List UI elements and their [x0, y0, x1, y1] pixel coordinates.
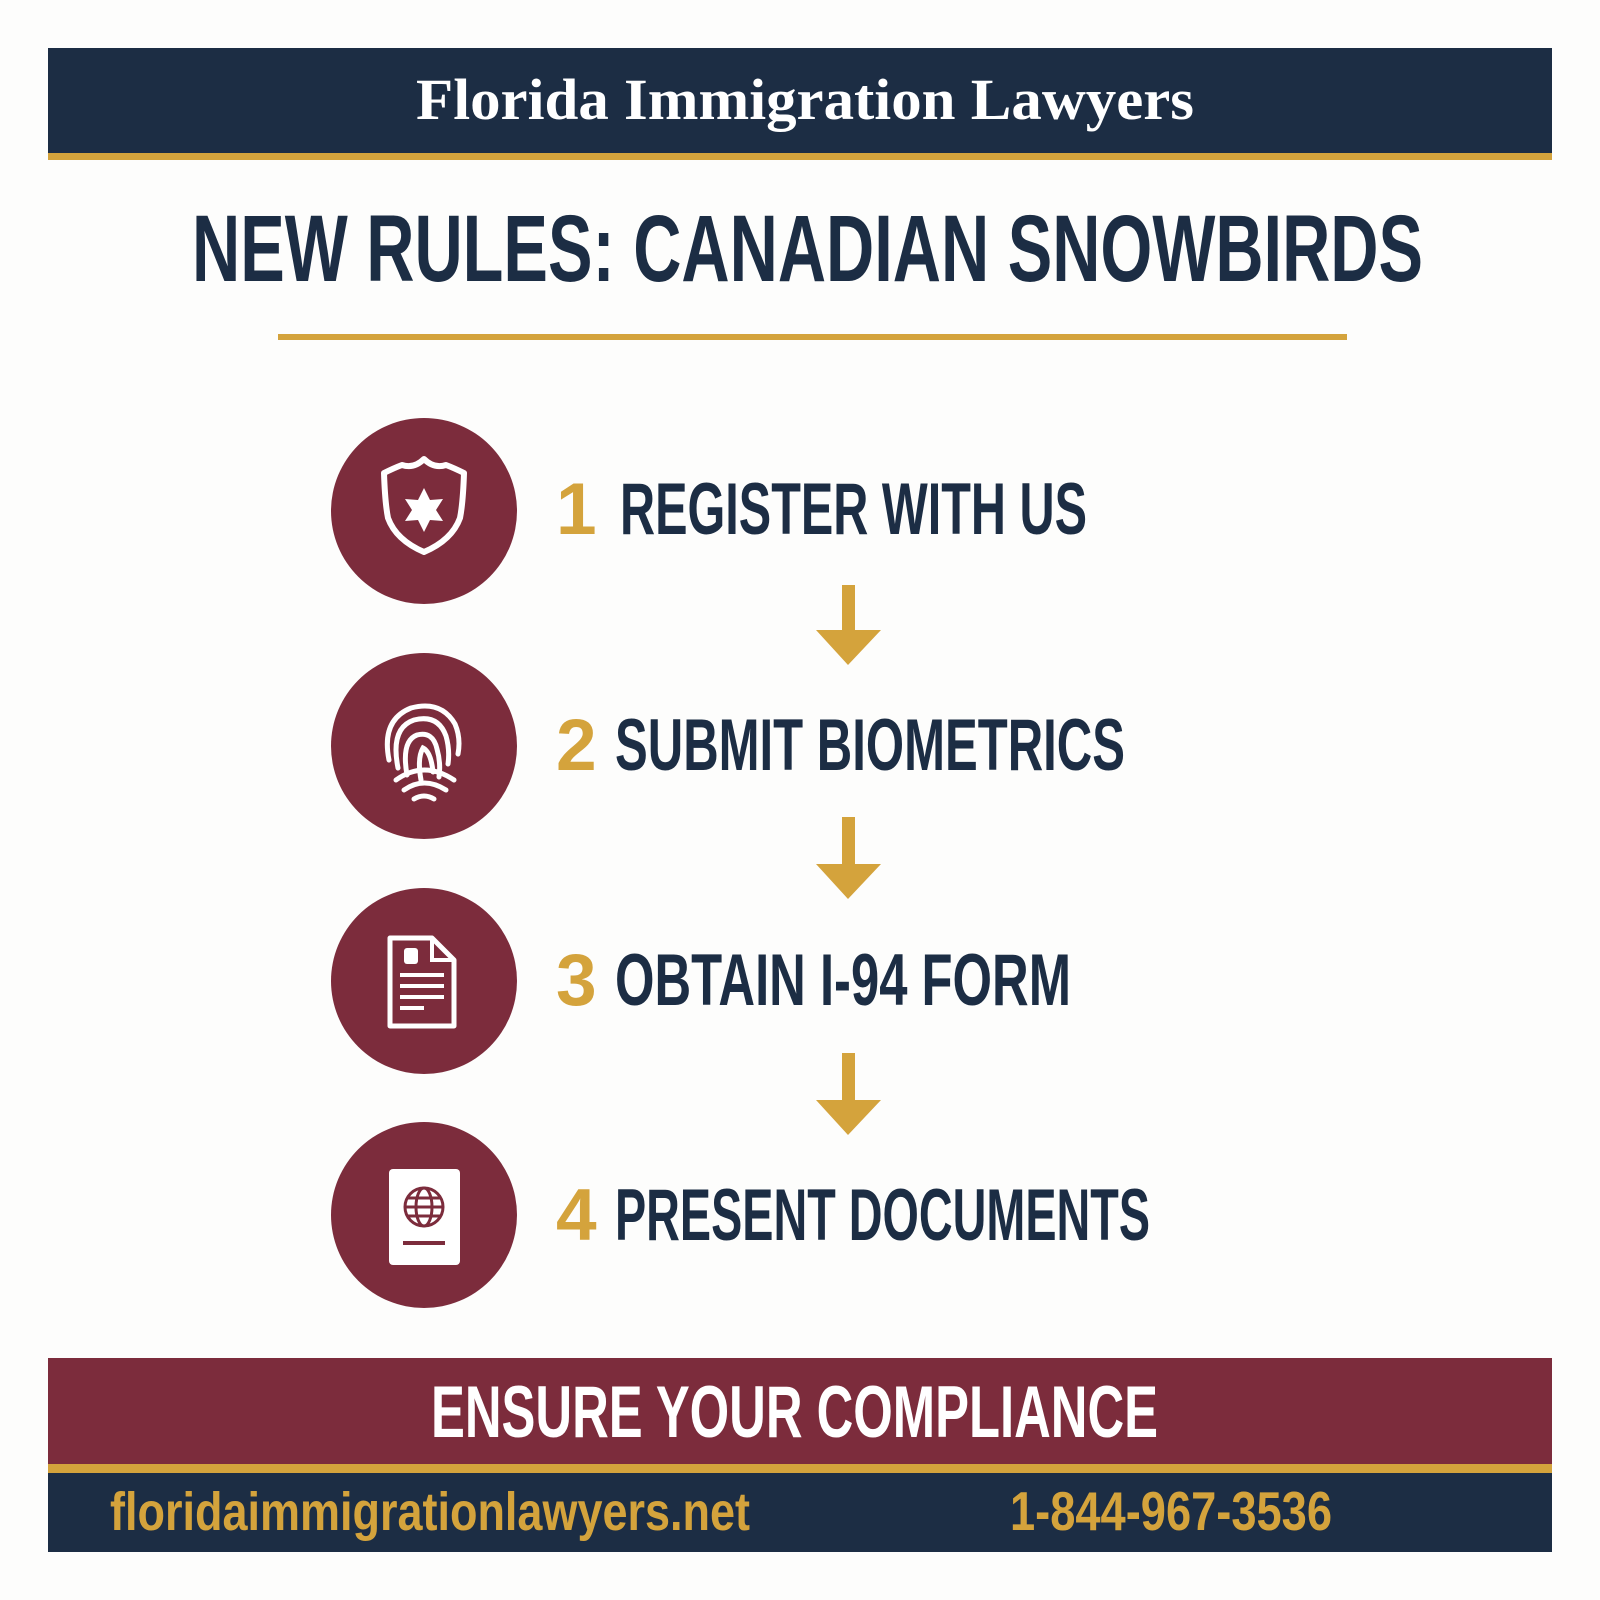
step 2: [331, 653, 1125, 839]
website: floridaimmigrationlawyers.net: [110, 1482, 750, 1542]
step 4: [331, 1122, 1150, 1308]
footer heading: ENSURE YOUR COMPLIANCE: [431, 1372, 1158, 1453]
arrow 1: [816, 585, 881, 665]
step label 3: OBTAIN I-94 FORM: [615, 940, 1071, 1021]
icon: fingerprint: [331, 653, 517, 839]
arrow 2: [816, 817, 881, 899]
icon: shield: [331, 418, 517, 604]
title underline: [278, 334, 1347, 340]
header bar: [48, 48, 1552, 160]
icon: document: [331, 888, 517, 1074]
step number 1: 1: [556, 469, 597, 550]
icon: passport: [331, 1122, 517, 1308]
step number 3: 3: [556, 940, 597, 1021]
step number 4: 4: [556, 1175, 597, 1256]
step 1: [331, 418, 1087, 604]
header text: Florida Immigration Lawyers: [416, 67, 1194, 132]
step 3: [331, 888, 1071, 1074]
step label 1: REGISTER WITH US: [620, 469, 1087, 550]
step number 2: 2: [556, 705, 597, 786]
step label 2: SUBMIT BIOMETRICS: [615, 705, 1125, 786]
footer banner: [48, 1358, 1552, 1552]
step label 4: PRESENT DOCUMENTS: [615, 1175, 1150, 1256]
phone: 1-844-967-3536: [1010, 1480, 1332, 1542]
arrow 3: [816, 1053, 881, 1135]
